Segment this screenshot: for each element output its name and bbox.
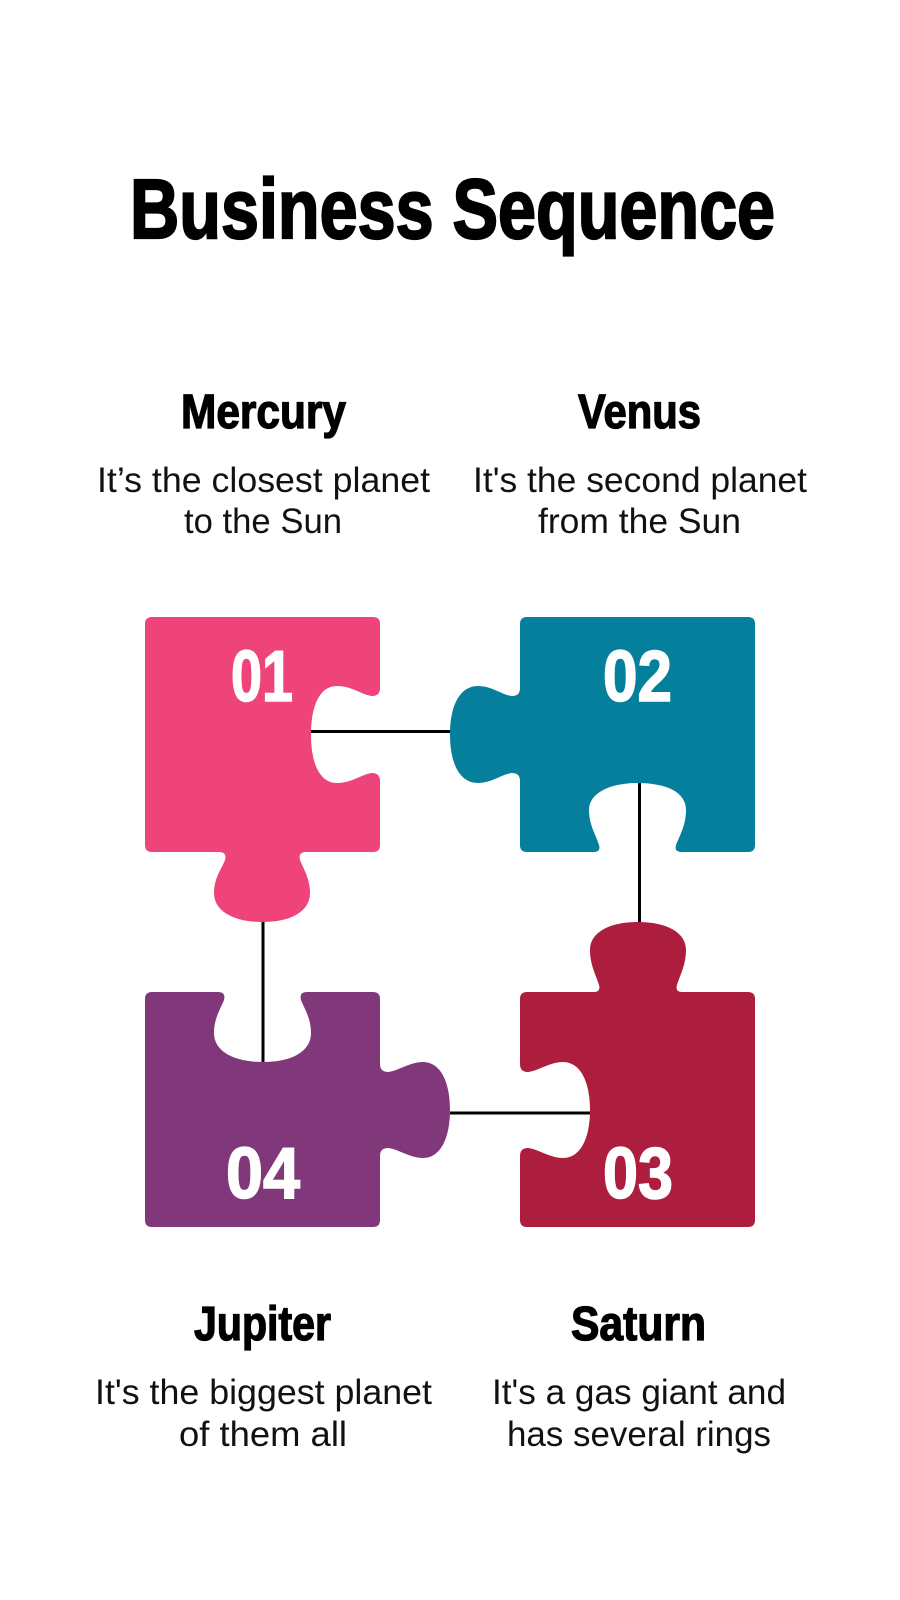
description: Venus bbox=[473, 461, 807, 541]
text block: Jupiter bbox=[95, 1298, 432, 1454]
number 02: 02 bbox=[603, 637, 672, 717]
number 01: 01 bbox=[231, 637, 293, 717]
text block: Saturn bbox=[492, 1298, 786, 1454]
puzzle piece 03 bbox=[520, 922, 755, 1227]
description: Saturn bbox=[492, 1373, 786, 1454]
puzzle piece 02 bbox=[450, 617, 755, 852]
description: Jupiter: of them all bbox=[179, 1415, 347, 1454]
description: Venus: from the Sun bbox=[538, 502, 741, 541]
text block: Mercury bbox=[97, 386, 430, 541]
description: Jupiter bbox=[95, 1373, 432, 1454]
description: Saturn: It's a gas giant and bbox=[492, 1373, 786, 1412]
connector lines between puzzle pieces bbox=[263, 732, 640, 1113]
heading: Mercury: Mercury bbox=[181, 386, 346, 439]
number 04: 04 bbox=[226, 1134, 300, 1214]
description: Mercury bbox=[97, 461, 430, 541]
description: Venus: It's the second planet bbox=[473, 461, 807, 500]
puzzle piece 01 bbox=[145, 617, 380, 922]
puzzle piece 04 bbox=[145, 992, 450, 1227]
description: Mercury: to the Sun bbox=[184, 502, 342, 541]
title: Business Sequence bbox=[130, 162, 775, 256]
description: Mercury: It’s the closest planet bbox=[97, 461, 430, 500]
heading: Jupiter: Jupiter bbox=[194, 1298, 331, 1351]
number 03: 03 bbox=[603, 1134, 673, 1214]
heading: Saturn: Saturn bbox=[571, 1298, 706, 1351]
text block: Venus bbox=[473, 386, 807, 541]
description: Saturn: has several rings bbox=[507, 1415, 771, 1454]
description: Jupiter: It's the biggest planet bbox=[95, 1373, 432, 1412]
heading: Venus: Venus bbox=[578, 386, 701, 439]
